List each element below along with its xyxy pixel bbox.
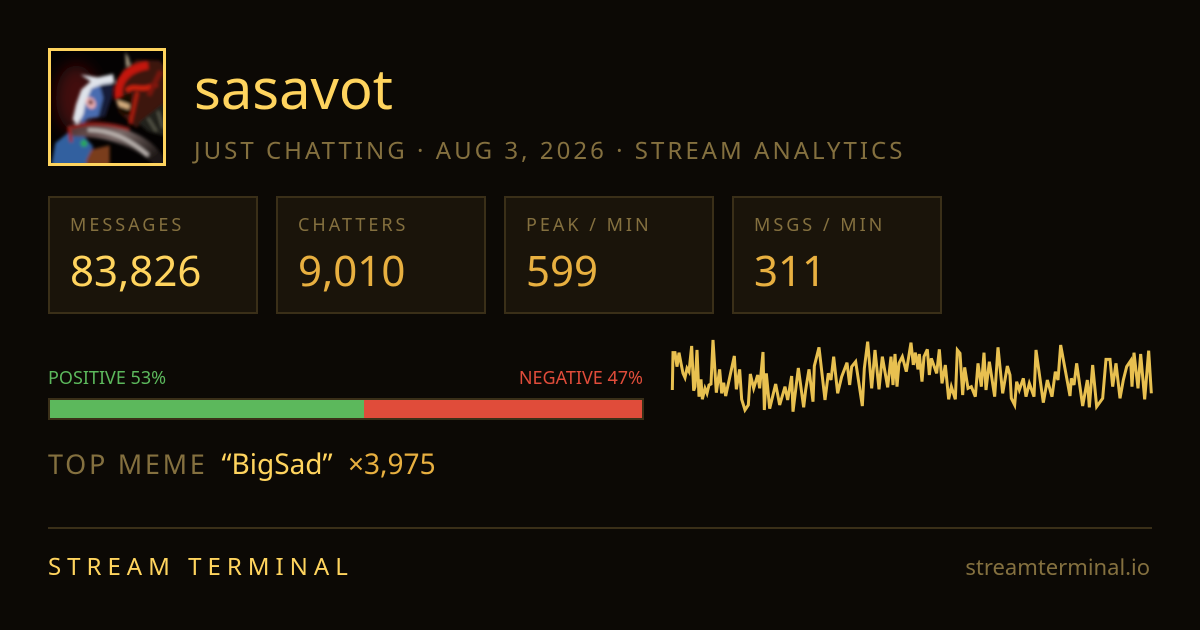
sentiment bar: [48, 398, 644, 420]
stat card: chatters: CHATTERS: [298, 213, 408, 237]
stat card: messages per minute: MSGS / MIN: [754, 213, 885, 237]
avatar: [48, 48, 166, 166]
stat card: peak per minute: PEAK / MIN: [526, 213, 652, 237]
stat card: messages: 83,826: [70, 242, 201, 299]
top meme count: ×3,975: [348, 445, 436, 483]
negative label: NEGATIVE 47%: [519, 366, 643, 390]
footer brand: STREAM TERMINAL: [48, 550, 354, 583]
footer url: streamterminal.io: [965, 552, 1150, 582]
stat card: messages per minute: [732, 196, 942, 314]
positive label: POSITIVE 53%: [48, 366, 166, 390]
stat card: messages: MESSAGES: [70, 213, 184, 237]
stat card: peak per minute: [504, 196, 714, 314]
stat card: chatters: [276, 196, 486, 314]
stat card: messages: [48, 196, 258, 314]
streamer name: sasavot: [194, 50, 393, 126]
subtitle: JUST CHATTING · AUG 3, 2026 · STREAM ANALYTICS: [194, 134, 905, 167]
stat card: chatters: 9,010: [298, 242, 405, 299]
stat card: messages per minute: 311: [754, 242, 826, 299]
top meme label: TOP MEME: [48, 445, 208, 482]
top meme name: “BigSad”: [222, 445, 333, 483]
stat card: peak per minute: 599: [526, 242, 598, 299]
footer divider: [48, 527, 1152, 529]
